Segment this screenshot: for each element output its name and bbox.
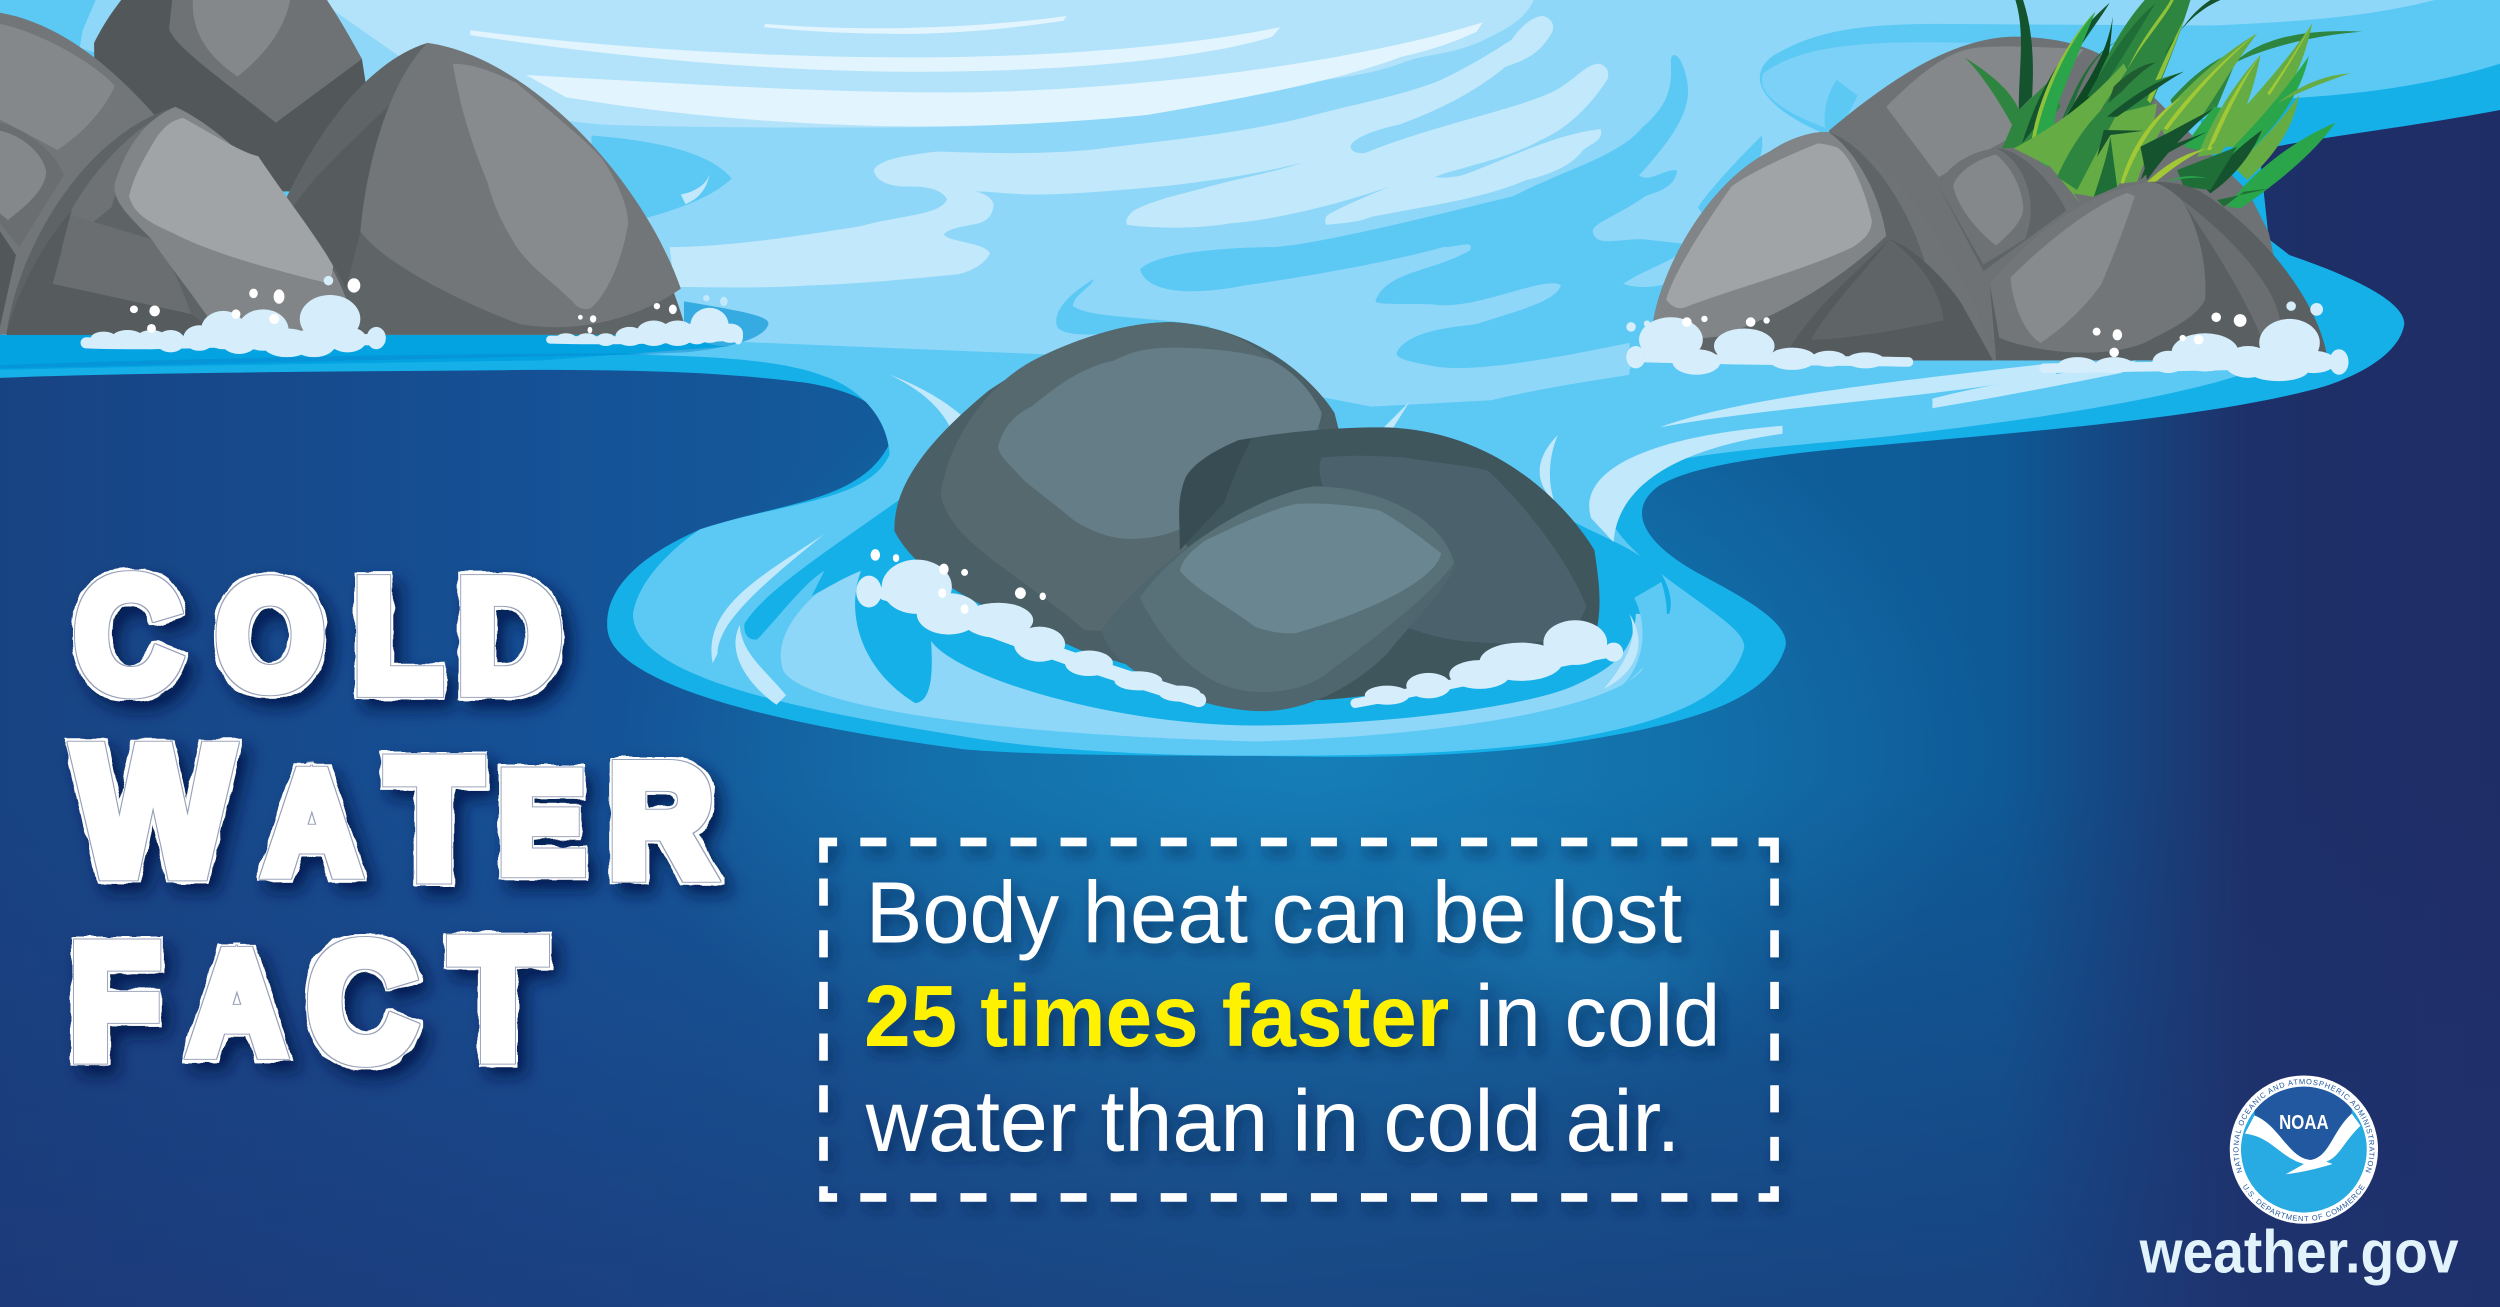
outer water edge	[0, 0, 2500, 757]
pale swirl	[670, 16, 1608, 287]
title line: fact: C	[308, 910, 416, 1094]
logo: NOAA wordmark: NOAA	[2279, 1111, 2329, 1134]
rock: right group back	[1829, 37, 2296, 360]
pale top water	[319, 0, 1534, 128]
rock: large right	[239, 43, 687, 335]
fact text: 25 times faster	[864, 967, 1449, 1065]
rock: large left	[894, 322, 1355, 686]
callout: dashed box with fact	[824, 842, 1775, 1197]
logo: NOAA seal	[2230, 1076, 2378, 1224]
foam: centre right	[1355, 620, 1623, 705]
title line: fact: F	[70, 911, 160, 1092]
mid water layer	[0, 0, 2500, 756]
rock: front light	[6, 107, 351, 335]
upper left blue	[0, 0, 96, 56]
fact text: Body heat can be lost	[866, 863, 1682, 961]
fact text: in cold	[1475, 967, 1720, 1065]
swirl inner bright	[744, 478, 1671, 725]
rocks: right group front	[1653, 132, 2328, 360]
rocks: centre group	[894, 322, 1600, 711]
title line: fact: A	[190, 924, 284, 1084]
fact text	[864, 863, 1720, 1170]
mid water blobs	[1140, 55, 1714, 375]
title line: water: E	[499, 745, 584, 901]
title line: water: R	[609, 732, 713, 909]
light water layer	[80, 0, 2435, 407]
dashed border	[824, 842, 1775, 1197]
water surface	[0, 0, 2500, 757]
title line: fact: T	[451, 905, 545, 1094]
title: cold water fact	[70, 544, 713, 1094]
title line: water: T	[387, 725, 481, 914]
foam: right second	[2044, 301, 2349, 381]
rock: front	[1102, 486, 1454, 711]
pale swirl strokes	[890, 375, 976, 462]
logo: ring text: NATIONAL OCEANIC AND ATMOSPHERIC ADMINISTRATION	[2233, 1079, 2374, 1173]
foam: top left large	[86, 276, 386, 357]
pale streaks	[470, 27, 1280, 72]
title line: cold: D	[458, 547, 561, 724]
grass tuft	[1964, 0, 2362, 208]
rock: front left	[1653, 132, 1996, 360]
left dark pool	[542, 301, 768, 357]
logo: department text: U.S. DEPARTMENT OF COMMERCE	[2243, 1184, 2365, 1222]
foam: centre left	[856, 549, 1201, 702]
fact text: water than in cold air.	[865, 1072, 1680, 1170]
title line: cold: O	[217, 551, 323, 720]
rock: front right	[1990, 182, 2328, 360]
title line: water: A	[265, 744, 359, 904]
rock: back right	[1179, 427, 1600, 700]
title line: water: W	[75, 708, 232, 913]
left shoreline bands	[0, 335, 733, 370]
title line: cold: L	[354, 547, 442, 724]
rock: far left	[0, 13, 172, 335]
water lower-right strip	[1550, 343, 1629, 387]
rocks: left group	[0, 0, 687, 335]
foam: right first	[1626, 316, 1908, 375]
title line: cold: C	[75, 544, 181, 725]
website label: weather.gov	[2139, 1217, 2459, 1285]
rock: small middle	[1939, 148, 2066, 271]
rock: back top	[94, 0, 383, 191]
swirl inner light	[781, 526, 1651, 741]
foam: top left small	[550, 295, 743, 346]
